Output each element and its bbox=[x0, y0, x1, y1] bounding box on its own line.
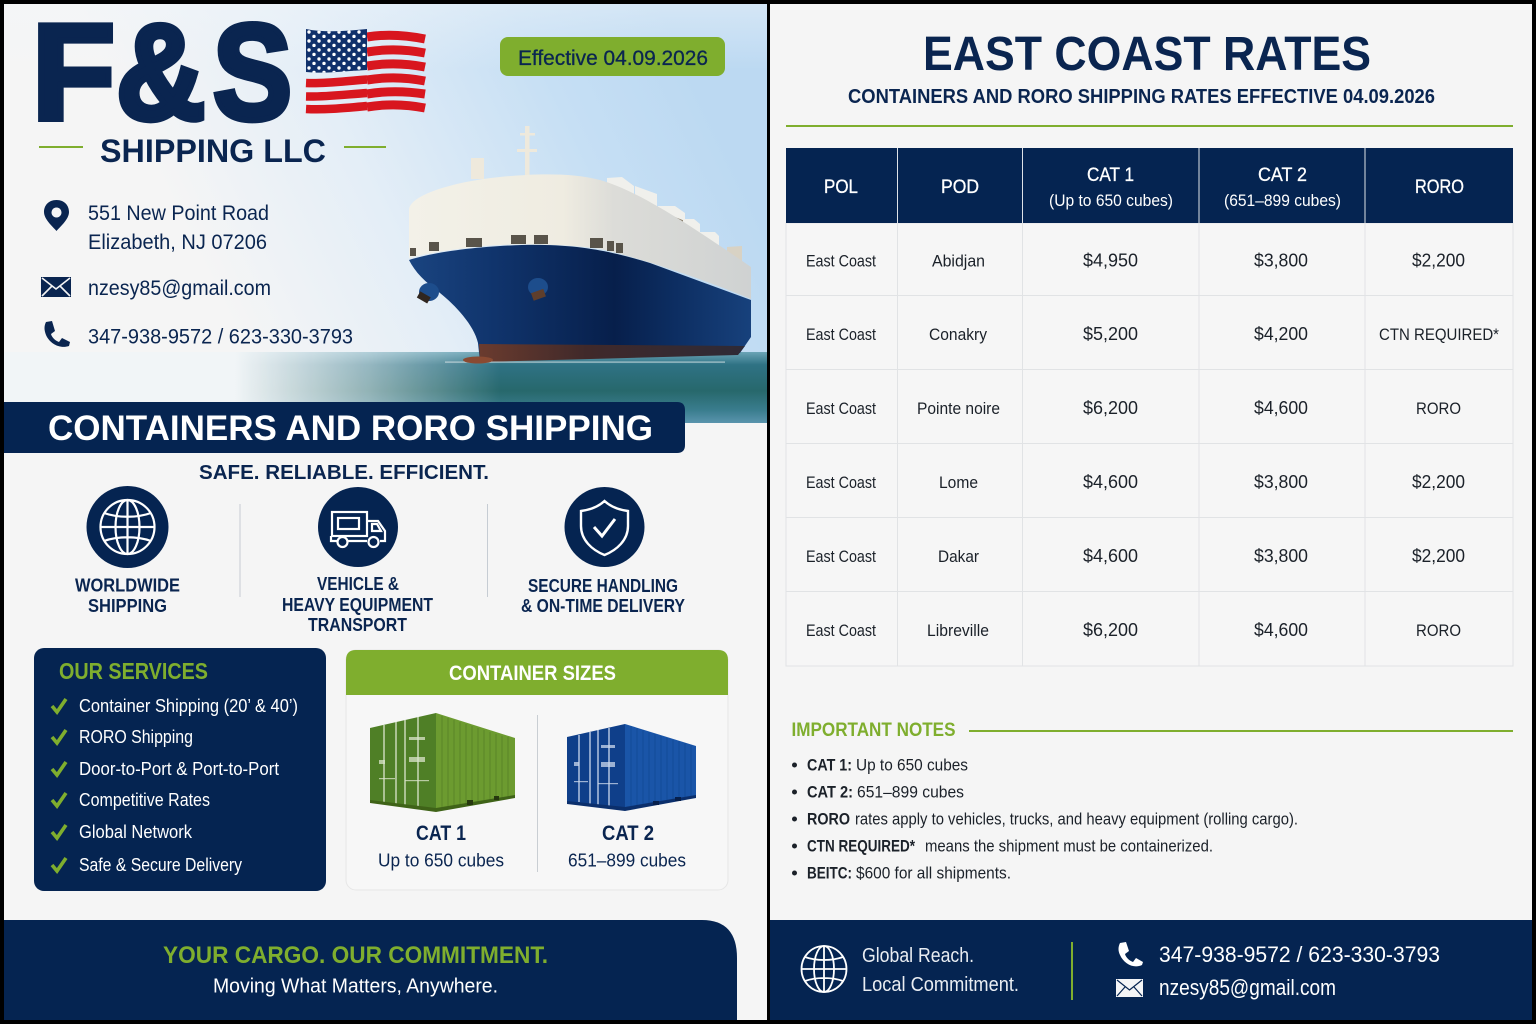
divider bbox=[240, 504, 241, 597]
label: & ON-TIME DELIVERY bbox=[521, 596, 685, 616]
notes list: BEITC: bbox=[807, 864, 852, 882]
icon: green container bbox=[370, 713, 515, 812]
icon: truck bbox=[318, 487, 398, 567]
heading: OUR SERVICES bbox=[59, 658, 208, 684]
table header: POL bbox=[824, 177, 858, 198]
logo: F&S wordmark bbox=[32, 0, 292, 148]
label: VEHICLE & bbox=[317, 574, 399, 594]
service list: Door-to-Port & Port-to-Port bbox=[79, 759, 279, 779]
table header: CAT 2 bbox=[1258, 165, 1307, 186]
divider bbox=[537, 715, 538, 872]
anchors bbox=[417, 278, 548, 303]
text: address bbox=[88, 202, 269, 254]
rates table bbox=[786, 148, 1513, 666]
row: Libreville bbox=[806, 620, 1461, 640]
row: Conakry: $4,200 bbox=[1254, 324, 1308, 344]
row: Dakar: Dakar bbox=[938, 548, 979, 566]
banner: containers and roro shipping: CONTAINERS AND RORO SHIPPING bbox=[48, 409, 653, 448]
row: Dakar: $3,800 bbox=[1254, 546, 1308, 566]
deck structures bbox=[607, 177, 742, 265]
slogan: Global Reach. bbox=[862, 945, 974, 967]
blue hull bbox=[409, 245, 751, 362]
icon: American flag bbox=[306, 29, 425, 109]
notes list: CAT 1: bbox=[807, 756, 852, 774]
icon: shield bbox=[564, 487, 644, 567]
label: WORLDWIDE bbox=[75, 576, 180, 596]
logo: F&S wordmark: & bbox=[116, 0, 206, 148]
hero: cargo ship bbox=[409, 126, 751, 364]
windows bbox=[410, 235, 623, 256]
table header: (651–899 cubes) bbox=[1224, 192, 1341, 210]
notes list: means the shipment must be containerized. bbox=[925, 838, 1213, 856]
phone numbers: 347-938-9572 / 623-330-3793 bbox=[1159, 942, 1440, 967]
category 2 label: CAT 2 bbox=[602, 822, 654, 845]
row: Lome: Lome bbox=[939, 474, 978, 492]
heading: important notes: IMPORTANT NOTES bbox=[792, 720, 956, 741]
row: Abidjan bbox=[806, 250, 1465, 270]
service list: Competitive Rates bbox=[79, 790, 210, 810]
panel: our services bbox=[34, 648, 326, 891]
row: Abidjan: $2,200 bbox=[1412, 250, 1465, 270]
category 1 label: CAT 1 bbox=[416, 822, 466, 845]
row: Conakry bbox=[806, 324, 1500, 344]
label bbox=[282, 574, 433, 635]
icon: envelope bbox=[41, 277, 71, 297]
panel: right rates page bbox=[770, 4, 1532, 1020]
badge: effective date: Effective 04.09.2026 bbox=[518, 47, 708, 70]
header bbox=[346, 650, 728, 695]
row: Libreville: Libreville bbox=[927, 622, 989, 640]
table header: CAT 1 bbox=[1087, 165, 1134, 186]
table header: RORO bbox=[1415, 177, 1464, 198]
icon: globe bbox=[802, 946, 846, 992]
row: Libreville: $4,600 bbox=[1254, 620, 1308, 640]
note bullets bbox=[792, 762, 797, 876]
tagline: SAFE. RELIABLE. EFFICIENT. bbox=[199, 461, 489, 484]
category 1 label bbox=[378, 822, 504, 870]
white superstructure bbox=[409, 174, 751, 299]
text: phone numbers: 347-938-9572 / 623-330-3793 bbox=[88, 326, 353, 348]
service list: RORO Shipping bbox=[79, 727, 193, 747]
category 1 label: Up to 650 cubes bbox=[378, 850, 504, 870]
label: SHIPPING bbox=[88, 596, 167, 616]
text: address: 551 New Point Road bbox=[88, 202, 269, 225]
table body background bbox=[786, 223, 1513, 666]
table grid bbox=[786, 223, 1513, 666]
divider bbox=[1071, 942, 1073, 1000]
row: Abidjan: East Coast bbox=[806, 252, 876, 270]
service list: Safe & Secure Delivery bbox=[79, 855, 242, 875]
table header: (Up to 650 cubes) bbox=[1049, 192, 1173, 210]
row: Dakar: $2,200 bbox=[1412, 546, 1465, 566]
text: email: nzesy85@gmail.com bbox=[88, 277, 271, 300]
row: Pointe noire: East Coast bbox=[806, 400, 876, 418]
label bbox=[521, 576, 685, 616]
row: Lome: East Coast bbox=[806, 474, 876, 492]
row: Pointe noire: $6,200 bbox=[1083, 398, 1138, 418]
row: Abidjan: $3,800 bbox=[1254, 250, 1308, 270]
ship mast bbox=[471, 126, 537, 179]
row: Lome bbox=[806, 472, 1465, 492]
row: Conakry: CTN REQUIRED* bbox=[1379, 326, 1500, 344]
divider bbox=[786, 125, 1513, 127]
subtitle: CONTAINERS AND RORO SHIPPING RATES EFFECTIVE 04.09.2026 bbox=[848, 86, 1435, 108]
row: Abidjan: $4,950 bbox=[1083, 250, 1138, 270]
notes list: RORO bbox=[807, 810, 850, 828]
row: Lome: $2,200 bbox=[1412, 472, 1465, 492]
icon: envelope bbox=[1116, 979, 1143, 997]
footer: left slogan: YOUR CARGO. OUR COMMITMENT. bbox=[163, 942, 548, 969]
row: Conakry: East Coast bbox=[806, 326, 876, 344]
row: Dakar: East Coast bbox=[806, 548, 876, 566]
notes list: Up to 650 cubes bbox=[856, 756, 968, 774]
logo: F&S wordmark: F bbox=[32, 0, 115, 148]
table header: POD bbox=[941, 177, 979, 198]
footer: right contact bar bbox=[770, 920, 1532, 1020]
feature: worldwide shipping bbox=[75, 486, 180, 616]
notes list: $600 for all shipments. bbox=[856, 864, 1011, 882]
notes list: rates apply to vehicles, trucks, and heavy equipment (rolling cargo). bbox=[855, 810, 1298, 828]
feature: vehicle transport bbox=[282, 487, 433, 635]
badge: effective date bbox=[500, 37, 725, 76]
service list: Container Shipping (20’ & 40’) bbox=[79, 696, 298, 716]
row: Pointe noire: $4,600 bbox=[1254, 398, 1308, 418]
category 2 label: 651–899 cubes bbox=[568, 850, 686, 870]
icon: blue container bbox=[567, 724, 696, 811]
row: Abidjan: Abidjan bbox=[932, 252, 985, 270]
category 2 label bbox=[568, 822, 686, 870]
logo: F&S wordmark: S bbox=[213, 0, 292, 148]
row: Dakar bbox=[806, 546, 1465, 566]
bulb and foam bbox=[445, 356, 725, 364]
email: nzesy85@gmail.com bbox=[1159, 975, 1336, 1000]
row: Dakar: $4,600 bbox=[1083, 546, 1138, 566]
feature: secure handling bbox=[521, 487, 685, 616]
label: SECURE HANDLING bbox=[528, 576, 678, 596]
panel: container sizes bbox=[346, 650, 728, 890]
row: Libreville: $6,200 bbox=[1083, 620, 1138, 640]
service list bbox=[79, 696, 298, 875]
row: Lome: $3,800 bbox=[1254, 472, 1308, 492]
notes list: CTN REQUIRED* bbox=[807, 838, 915, 856]
check marks bbox=[52, 699, 66, 871]
text: address: Elizabeth, NJ 07206 bbox=[88, 231, 267, 254]
row: Lome: $4,600 bbox=[1083, 472, 1138, 492]
row: Pointe noire: Pointe noire bbox=[917, 400, 1000, 418]
row: Pointe noire bbox=[806, 398, 1461, 418]
icon: location pin bbox=[44, 200, 69, 231]
row: Conakry: $5,200 bbox=[1083, 324, 1138, 344]
panel: container sizes: CONTAINER SIZES bbox=[449, 662, 616, 685]
label: HEAVY EQUIPMENT bbox=[282, 595, 433, 615]
icon: globe bbox=[86, 486, 168, 568]
icon: phone bbox=[1118, 942, 1143, 966]
slogan bbox=[862, 945, 1019, 996]
table header bbox=[786, 148, 1513, 223]
service list: Global Network bbox=[79, 822, 193, 842]
hero: sky and sea background bbox=[193, 4, 767, 423]
slogan: Local Commitment. bbox=[862, 974, 1019, 996]
logo: Shipping LLC: SHIPPING LLC bbox=[100, 133, 326, 169]
title: EAST COAST RATES bbox=[923, 28, 1371, 81]
row: Conakry: Conakry bbox=[929, 326, 988, 344]
panel: left flyer page bbox=[4, 4, 767, 1020]
label bbox=[75, 576, 180, 616]
banner: containers and roro shipping bbox=[4, 402, 685, 453]
notes list: CAT 2: bbox=[807, 784, 853, 802]
label: TRANSPORT bbox=[308, 615, 407, 635]
notes list bbox=[792, 756, 1298, 882]
icon: phone bbox=[44, 321, 70, 347]
footer: left slogan: Moving What Matters, Anywhere. bbox=[213, 976, 498, 998]
divider bbox=[487, 504, 488, 597]
notes list: 651–899 cubes bbox=[857, 784, 964, 802]
antifouling band bbox=[479, 344, 745, 362]
row: Libreville: RORO bbox=[1416, 622, 1461, 640]
row: Pointe noire: RORO bbox=[1416, 400, 1461, 418]
footer: left slogan bbox=[4, 920, 737, 1020]
row: Libreville: East Coast bbox=[806, 622, 876, 640]
